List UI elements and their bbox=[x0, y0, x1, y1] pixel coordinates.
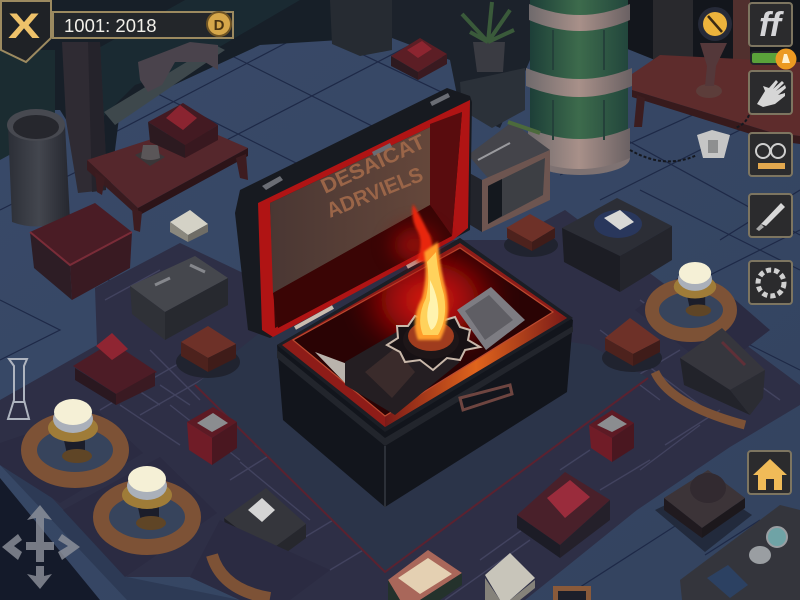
directional pad bbox=[2, 505, 80, 589]
silver case bbox=[224, 488, 306, 566]
grey case on carpet bbox=[130, 256, 228, 340]
button: ring of stones bbox=[749, 261, 792, 304]
button: blade bbox=[749, 194, 792, 237]
button: goggles bbox=[749, 133, 792, 176]
chain bbox=[630, 115, 749, 161]
small crown icon bbox=[697, 130, 730, 158]
brown cube on disc left bbox=[176, 326, 240, 378]
top wall shelf bbox=[330, 0, 530, 128]
level counter bar: 1001: 2018 bbox=[64, 15, 157, 36]
metal case behind chest bbox=[462, 122, 550, 232]
maroon box lower left bbox=[73, 333, 157, 405]
maroon trunk left bbox=[30, 203, 132, 300]
white block bottom bbox=[485, 553, 535, 600]
vase with yellow dial bbox=[696, 7, 732, 98]
ornate rug and lamp 2 bbox=[63, 457, 217, 577]
exit badge: X bbox=[8, 7, 41, 46]
dark case right bbox=[680, 328, 765, 415]
red box on table bbox=[148, 103, 218, 158]
button: ff: ff bbox=[759, 6, 785, 44]
flame bowl bbox=[387, 312, 480, 370]
orange rug fragment right bbox=[655, 372, 745, 425]
platform under chest bbox=[195, 300, 648, 572]
stone control panel bottom right bbox=[680, 505, 800, 600]
chest lid bbox=[235, 88, 472, 338]
level counter bar: D bbox=[214, 17, 225, 34]
red cube with ore left bbox=[187, 407, 237, 465]
ornate rug and lamp 1 bbox=[0, 399, 143, 503]
maroon box bottom bbox=[517, 472, 610, 558]
small frame at bottom edge bbox=[553, 586, 591, 600]
poster title bbox=[317, 130, 429, 223]
green drum tower bbox=[526, 0, 632, 175]
chest interior and red rim bbox=[277, 238, 573, 432]
fire glow bbox=[353, 218, 508, 354]
flame bbox=[412, 204, 448, 340]
exit badge bbox=[1, 1, 51, 62]
trash can bbox=[7, 109, 70, 227]
dark cube with gear bbox=[562, 198, 672, 292]
potted plant bbox=[462, 2, 514, 72]
button: ff bbox=[749, 3, 792, 46]
left table bbox=[87, 125, 248, 232]
chest body bbox=[277, 238, 573, 507]
small grey weight on table bbox=[135, 145, 165, 166]
pillar outline icon bbox=[8, 359, 29, 419]
dark wall top right bbox=[625, 0, 800, 95]
dark pedestal box bbox=[655, 470, 752, 552]
battery meter bbox=[750, 48, 796, 70]
poster title: ADRVIELS bbox=[323, 163, 426, 223]
level counter bar bbox=[53, 12, 233, 38]
ornate rug 3 bbox=[190, 520, 330, 600]
bench bbox=[138, 42, 218, 92]
documents in chest bbox=[315, 287, 525, 383]
dark cloth in chest bbox=[345, 330, 460, 415]
white block left bbox=[170, 210, 208, 242]
button: glove bbox=[749, 71, 792, 114]
button: home bbox=[748, 451, 791, 494]
brown cube right bbox=[602, 318, 662, 372]
decorated tile bottom bbox=[388, 550, 462, 600]
maroon box top centre bbox=[391, 38, 447, 80]
carpet around chest bbox=[0, 210, 800, 600]
floor edge bottom left bbox=[0, 443, 240, 600]
brown cube on disc centre right bbox=[504, 214, 558, 257]
wall top left bbox=[0, 0, 420, 190]
right table bbox=[632, 55, 800, 144]
red cube with ore right bbox=[589, 410, 634, 462]
poster title: DESAICAT bbox=[317, 130, 429, 199]
pillar bbox=[62, 42, 106, 193]
ornate rug and lamp 3 bbox=[635, 262, 770, 372]
